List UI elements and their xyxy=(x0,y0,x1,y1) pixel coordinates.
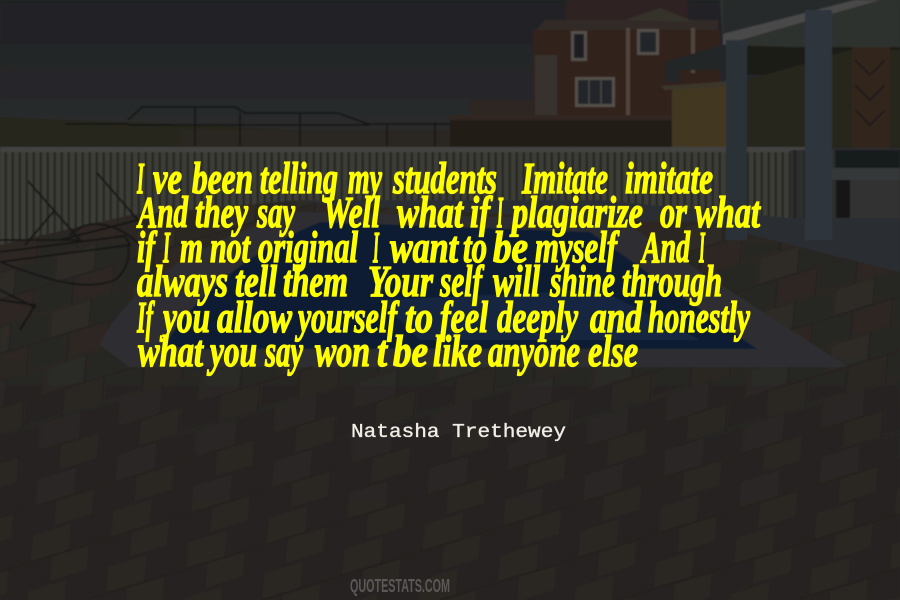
quote line 3: not xyxy=(210,223,251,272)
dark porch interior xyxy=(746,45,900,75)
distant buildings xyxy=(470,100,535,146)
quote line 5: honestly xyxy=(648,293,750,342)
quote line 3: to xyxy=(463,223,487,272)
quote line 3: I xyxy=(163,223,171,272)
quote line 3: myself xyxy=(535,223,620,272)
quote line 6: like xyxy=(433,327,482,376)
quote line 3: if xyxy=(137,223,158,272)
brown house xyxy=(450,0,720,148)
sky xyxy=(0,0,900,150)
quote line 6 xyxy=(138,327,638,376)
quote line 2 xyxy=(136,188,761,237)
quote line 2: or xyxy=(660,188,688,237)
quote line 3 xyxy=(137,223,706,272)
watermark: QUOTESTATS.COM xyxy=(350,576,450,596)
quote line 1: my xyxy=(348,154,382,203)
quote line 2: they xyxy=(195,188,248,237)
quote line 2: I xyxy=(497,188,504,237)
author name: Natasha Trethewey xyxy=(351,421,566,443)
quote line 4: shine xyxy=(549,257,615,306)
ground xyxy=(0,200,900,600)
quote line 4: through xyxy=(622,257,722,306)
quote line 6: say xyxy=(264,327,303,376)
quote line 1: Imitate xyxy=(521,154,608,203)
lower deck xyxy=(450,115,675,120)
quote line 3: original xyxy=(258,223,359,272)
quote line 6: won xyxy=(315,327,370,376)
quote line 4 xyxy=(137,257,722,306)
boardwalk silhouette xyxy=(65,107,450,146)
quote line 3: m xyxy=(180,223,203,272)
porch columns xyxy=(726,40,747,240)
paving bricks xyxy=(0,200,900,600)
quote line 4: tell xyxy=(235,257,278,306)
palms and shrubs xyxy=(746,50,900,148)
pool coping xyxy=(100,212,848,367)
quote line 1: I xyxy=(137,154,145,203)
quote line 4: self xyxy=(439,257,485,306)
porch ceiling and beam xyxy=(720,0,900,47)
quote text xyxy=(136,154,761,376)
quote line 1: telling xyxy=(260,154,338,203)
quote line 6: else xyxy=(588,327,638,376)
quote line 2: if xyxy=(470,188,493,237)
quote line 5: If xyxy=(136,293,155,342)
quote line 6: anyone xyxy=(488,327,580,376)
dune grass xyxy=(0,117,540,150)
quote line 1: ve xyxy=(153,154,182,203)
quote line 5 xyxy=(136,293,750,342)
white fence xyxy=(0,150,830,245)
quote line 5: deeply xyxy=(497,293,578,342)
grill xyxy=(832,150,900,218)
pool water xyxy=(165,222,757,349)
lounge chairs xyxy=(0,173,140,330)
quote line 5: and xyxy=(590,293,643,342)
quote line 3: be xyxy=(493,223,528,272)
quote line 2: plagiarize xyxy=(509,188,643,237)
quote line 6: be xyxy=(393,327,428,376)
quote line 5: yourself xyxy=(295,293,400,342)
quote line 1 xyxy=(137,154,713,203)
quote line 4: will xyxy=(493,257,541,306)
quote line 2: what xyxy=(397,188,464,237)
quote line 6: what xyxy=(138,327,204,376)
quote line 2: Well xyxy=(323,188,381,237)
quote line 5: to xyxy=(405,293,433,342)
quote line 3: And xyxy=(640,223,691,272)
concrete deck behind pool xyxy=(300,200,900,272)
quote line 1: students xyxy=(392,154,497,203)
quote line 5: you xyxy=(159,293,210,342)
quote line 5: allow xyxy=(217,293,293,342)
quote line 4: Your xyxy=(368,257,434,306)
quote line 4: them xyxy=(283,257,348,306)
windows xyxy=(571,31,587,61)
quote line 2: what xyxy=(695,188,761,237)
quote line 3: I xyxy=(373,223,380,272)
quote line 6: you xyxy=(206,327,257,376)
quote line 2: say xyxy=(256,188,295,237)
quote line 5: feel xyxy=(440,293,489,342)
quote line 3: want xyxy=(390,223,459,272)
yellow neighbouring wall xyxy=(672,85,734,148)
quote line 1: been xyxy=(192,154,253,203)
quote line 1: imitate xyxy=(625,154,713,203)
quote line 6: t xyxy=(377,327,388,376)
quote line 4: always xyxy=(137,257,228,306)
quote text: I xyxy=(699,223,706,272)
quote line 2: And xyxy=(136,188,189,237)
